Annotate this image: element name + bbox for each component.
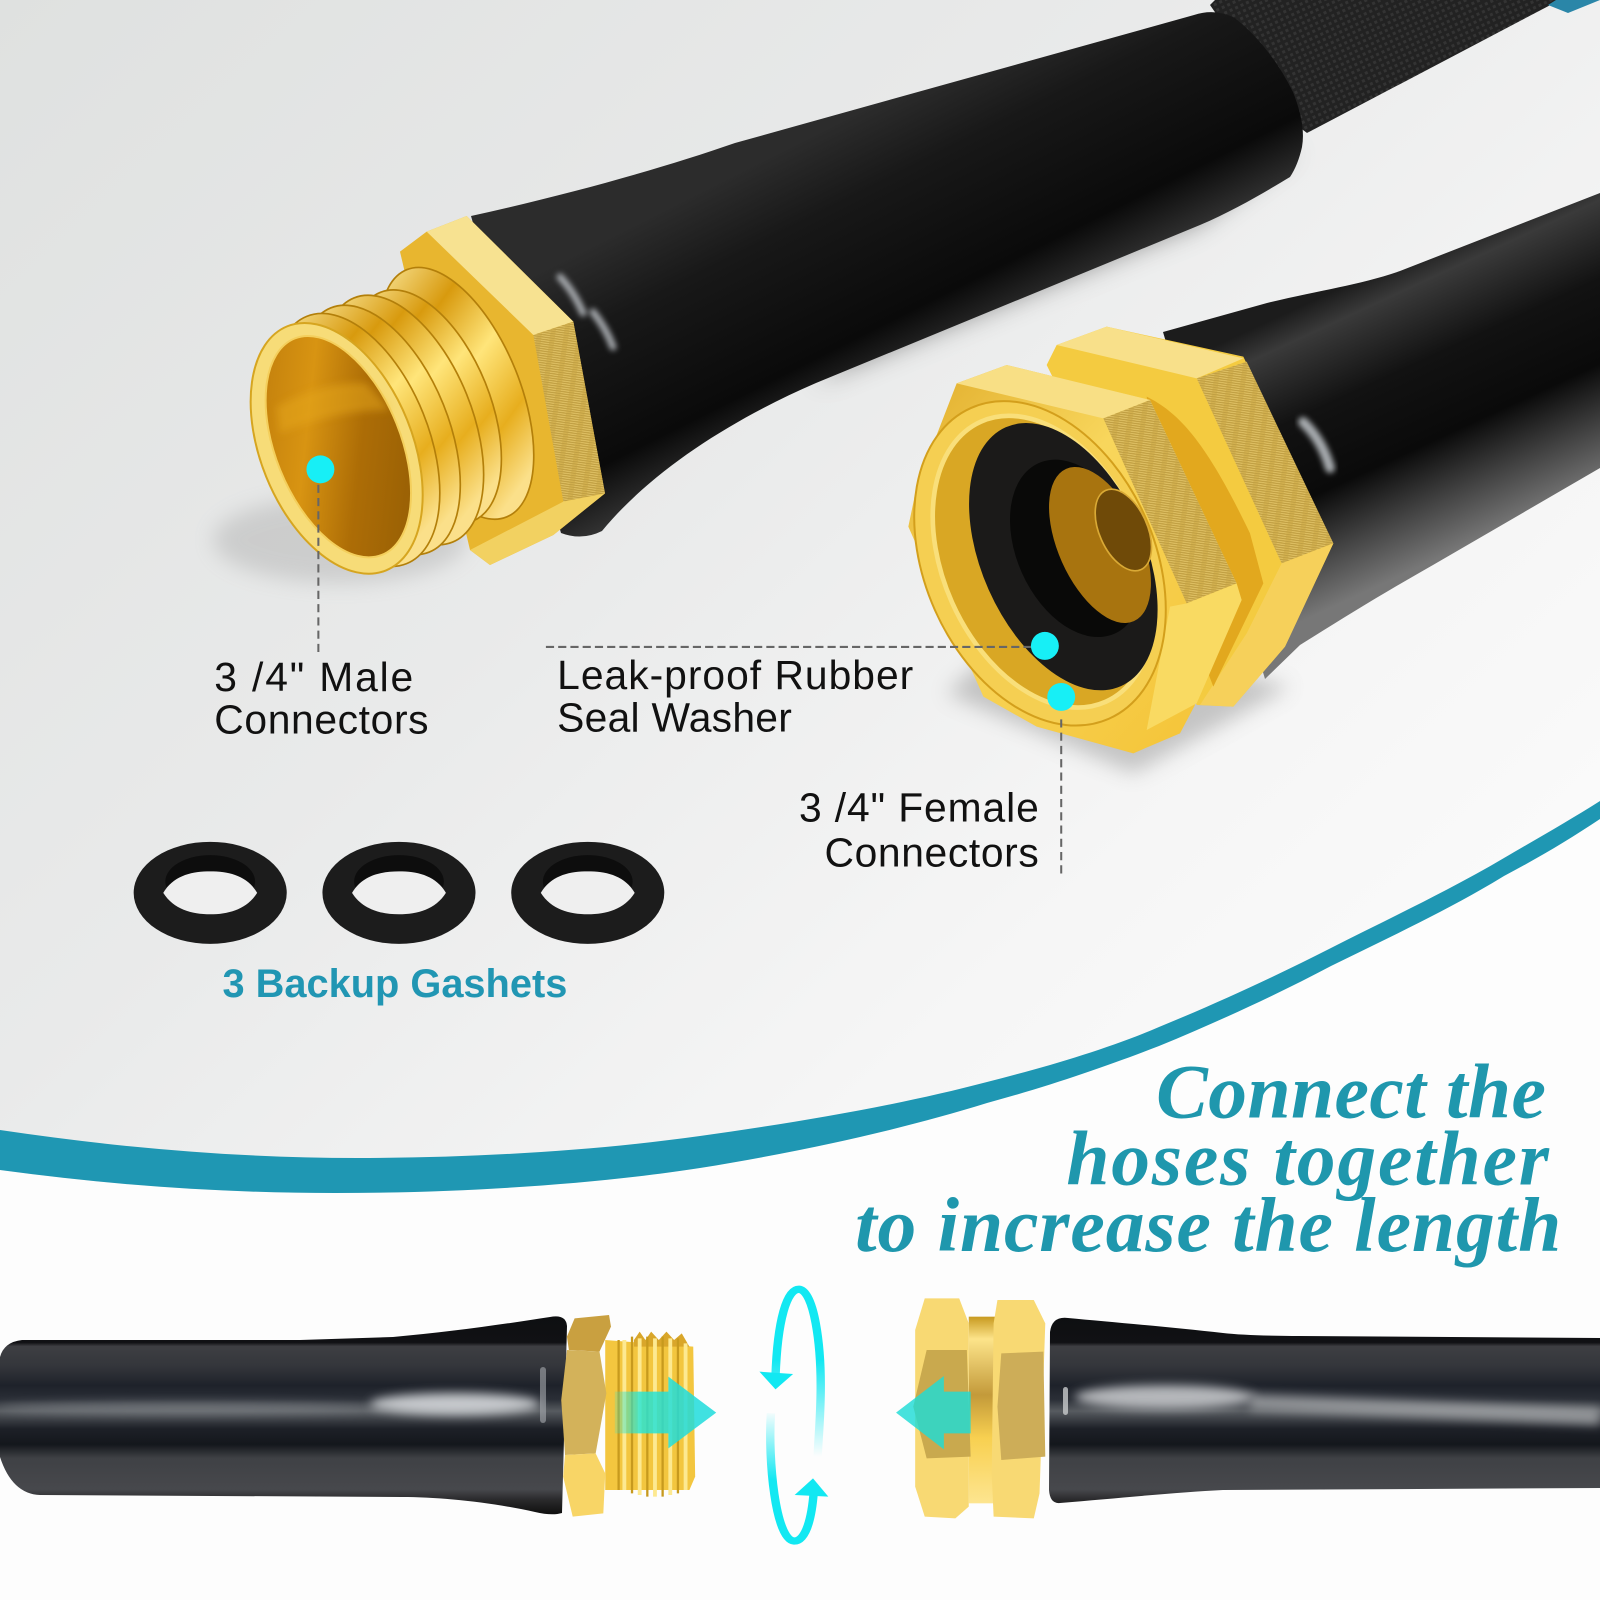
arrow: push right [615,1377,716,1448]
three backup gaskets [134,842,664,944]
label: male connectors: Connectors [214,697,429,743]
rotation arrow [759,1289,828,1541]
rear hex nut [1047,327,1333,707]
arrow: push left [896,1376,971,1449]
bottom left hose sleeve [0,1316,567,1514]
marker dot: rubber washer [1031,632,1059,660]
marker dot: female connector [1047,683,1075,711]
label: female connectors: 3 /4" Female [799,784,1039,830]
marker dot: male connector [306,455,334,483]
connector mouth [217,298,456,599]
headline: hoses together [1066,1116,1550,1202]
female brass connector [866,327,1333,773]
label: rubber seal washer: Leak-proof Rubber [557,652,913,698]
gasket one [134,842,287,944]
front hex nut [908,365,1242,753]
threaded neck [240,246,565,590]
teal swoosh curve [0,801,1600,1193]
upper hose [471,0,1600,537]
threaded opening and rubber washer [866,361,1214,765]
label: rubber seal washer: Seal Washer [557,695,792,741]
male brass connector [213,216,605,599]
headline: to increase the length [855,1182,1561,1268]
white lower background below the curve [0,819,1600,1600]
headline: Connect the [1156,1048,1546,1134]
gaskets caption: 3 Backup Gashets [222,962,567,1006]
bottom right hose sleeve [1049,1318,1600,1503]
gasket three [511,842,664,944]
bottom male connector [561,1315,695,1517]
bottom female connector [913,1298,1045,1518]
label: male connectors: 3 /4" Male [214,654,413,700]
dashed leader: male connector [317,485,319,653]
headline [855,1048,1561,1268]
gasket two [322,842,476,944]
neck band [1147,397,1263,687]
label: female connectors: Connectors [824,829,1039,875]
dashed leader: rubber washer [546,646,1036,648]
bottom connectors and motion arrows [561,1289,1045,1541]
dashed leader: female connector [1060,719,1062,873]
hex nut [400,216,605,565]
lower hose [1163,193,1600,679]
